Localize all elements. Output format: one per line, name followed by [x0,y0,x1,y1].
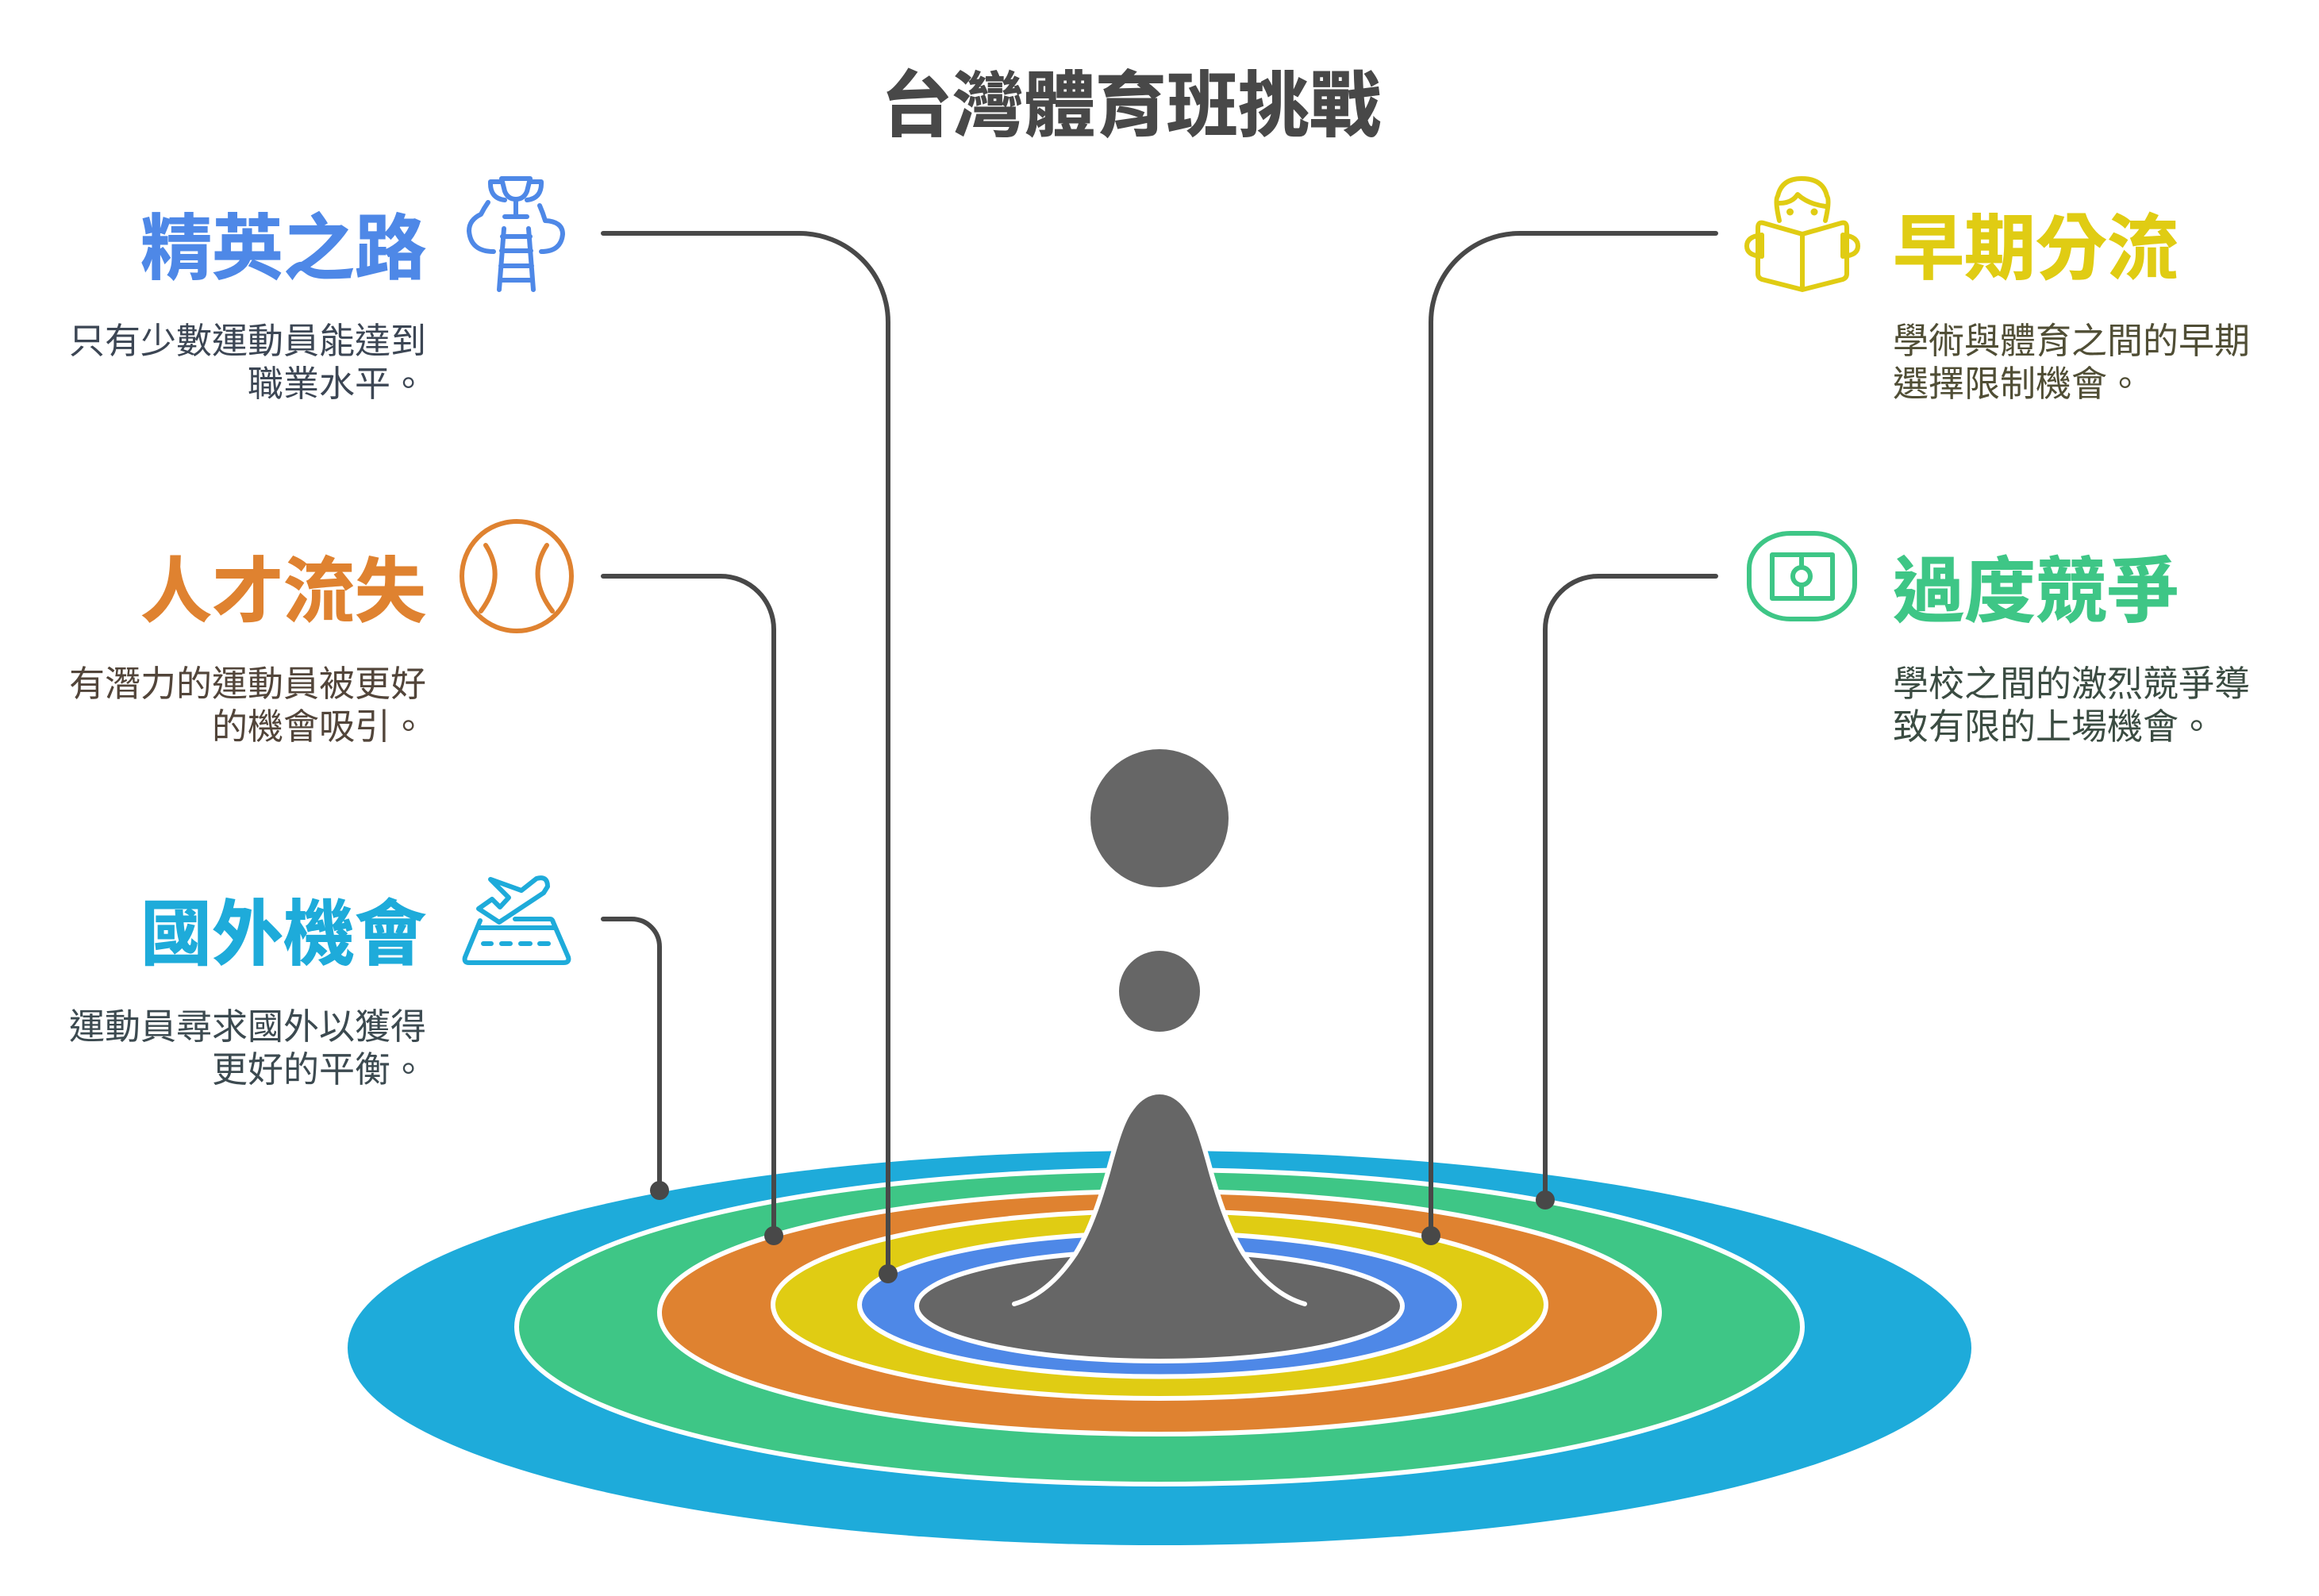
panel: 人才流失 [69,521,571,747]
connector: 精英之路 [603,233,898,1283]
heading: 人才流失 [140,552,426,632]
ring: 國外機會 cyan [348,1151,1971,1545]
water peak [1014,1092,1305,1304]
description: 有潛力的運動員被更好 [69,663,426,704]
connector: 過度競爭 [1536,576,1716,1209]
description: 的機會吸引。 [212,706,426,747]
droplet small [1119,951,1200,1032]
icon: plane and runway [465,878,568,963]
connector: 人才流失 [603,576,783,1245]
description: 職業水平。 [248,363,426,404]
ring: 過度競爭 green [517,1170,1802,1484]
ring: center gray [917,1251,1402,1361]
target rings diagram [348,1092,1971,1545]
icon: child reading book [1747,179,1858,290]
description: 更好的平衡。 [212,1049,426,1090]
panel: 過度競爭 [1749,533,2250,747]
heading: 早期分流 [1893,210,2179,289]
panel: 國外機會 [69,878,568,1090]
description: 運動員尋求國外以獲得 [69,1006,426,1047]
panel: 早期分流 [1747,179,2250,404]
description: 選擇限制機會。 [1893,363,2143,404]
title: 台灣體育班挑戰 [881,67,1381,146]
icon: baseball [462,521,571,631]
description: 學校之間的激烈競爭導 [1893,663,2250,704]
droplet large [1090,749,1229,887]
heading: 國外機會 [140,895,426,975]
ring: 精英之路 blue [860,1233,1459,1376]
connector: 早期分流 [1421,233,1716,1245]
description: 致有限的上場機會。 [1893,706,2214,747]
icon: trophy and ladder [469,179,563,290]
icon: sports field [1749,533,1855,619]
heading: 過度競爭 [1893,552,2179,632]
connector: 國外機會 [603,919,669,1200]
ring: 人才流失 orange [660,1191,1659,1434]
ring: 早期分流 yellow [773,1211,1546,1398]
panel: 精英之路 [69,179,563,404]
description: 學術與體育之間的早期 [1893,321,2250,361]
description: 只有少數運動員能達到 [69,321,426,361]
heading: 精英之路 [140,210,426,289]
